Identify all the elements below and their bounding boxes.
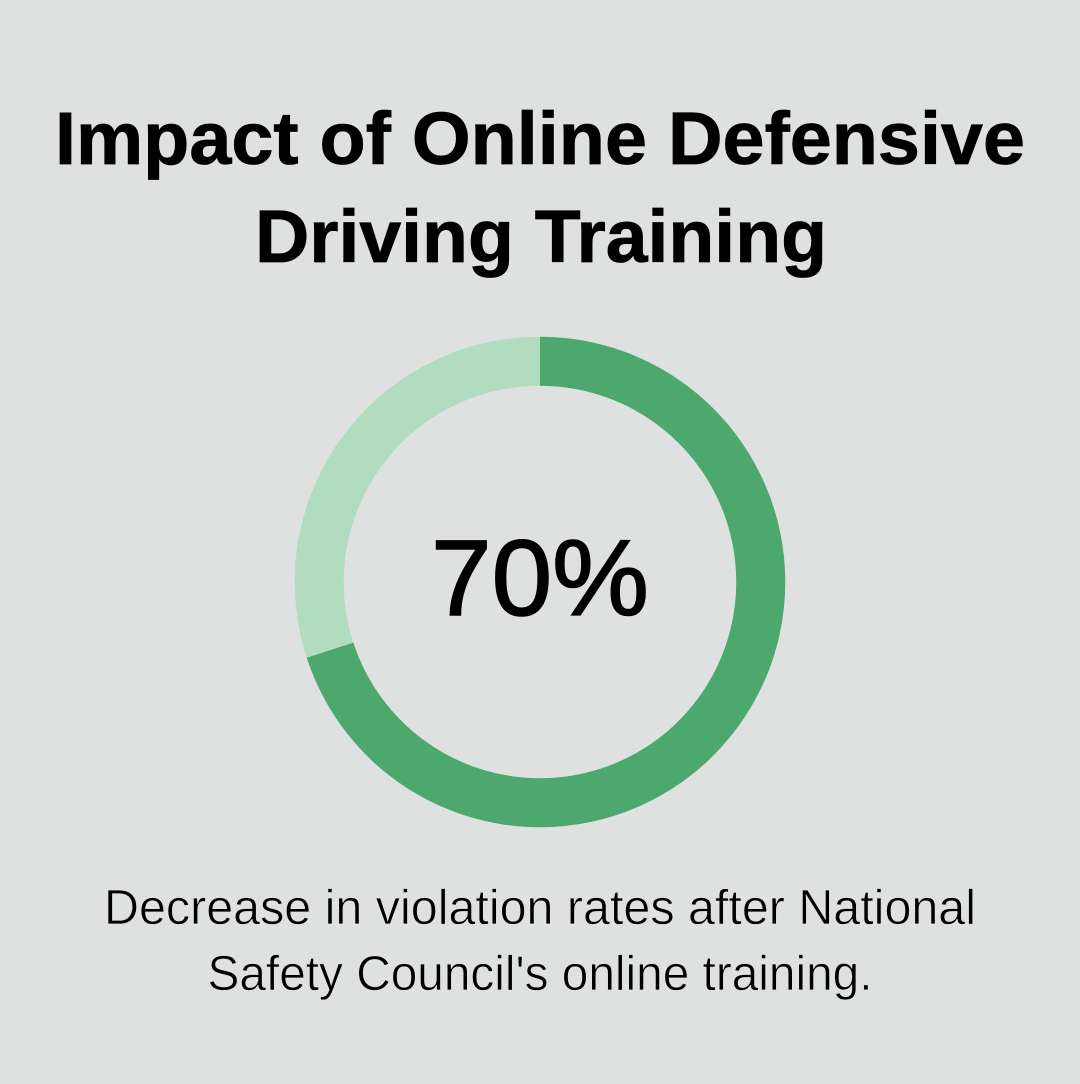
caption: Safety Council's online training. <box>208 947 872 1001</box>
donut remainder segment <box>319 361 761 803</box>
title: Driving Training <box>255 195 827 278</box>
title <box>55 97 1025 278</box>
caption <box>104 881 976 1001</box>
title: Impact of Online Defensive <box>55 97 1025 180</box>
donut 70% segment <box>330 361 761 803</box>
center value: 70% <box>431 517 649 638</box>
caption: Decrease in violation rates after National <box>104 881 976 935</box>
donut chart: 70% <box>319 361 761 803</box>
